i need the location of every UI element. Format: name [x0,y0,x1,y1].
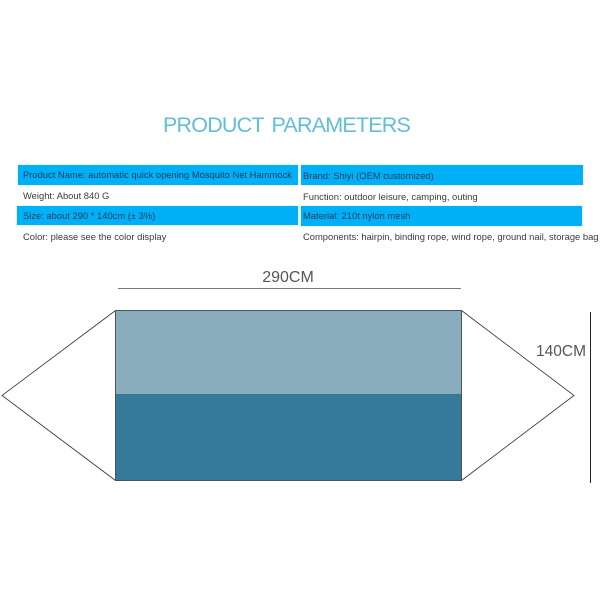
spec text: color: Color: please see the color display [23,231,166,242]
spec row: brand [301,165,583,185]
width label: 290CM [262,269,314,286]
width dimension line [118,288,461,290]
spec row: brand: Brand: Shiyi (OEM customized) [303,170,434,181]
hammock lower panel [116,394,462,480]
spec row: size [17,206,298,225]
spec row: material: Material: 210t nylon mesh [303,210,410,221]
title: PRODUCT PARAMETERS [163,113,410,137]
height label: 140CM [536,343,586,360]
height dimension line [590,312,592,483]
spec text: components: Components: hairpin, binding rope, wind rope, ground nail, storage bag [303,231,599,242]
hammock upper panel [116,310,462,394]
right end triangle [462,310,574,480]
hammock outline [116,310,462,480]
left end triangle [2,310,116,480]
spec text: weight: Weight: About 840 G [23,190,109,201]
spec row: product name: Product Name: automatic quick opening Mosquito Net Hammock [23,169,292,180]
spec row: product name [18,165,298,185]
spec text: function: Function: outdoor leisure, camping, outing [303,191,478,202]
spec row: material [301,206,582,226]
spec row: size: Size: about 290 * 140cm (± 3%) [23,210,155,221]
